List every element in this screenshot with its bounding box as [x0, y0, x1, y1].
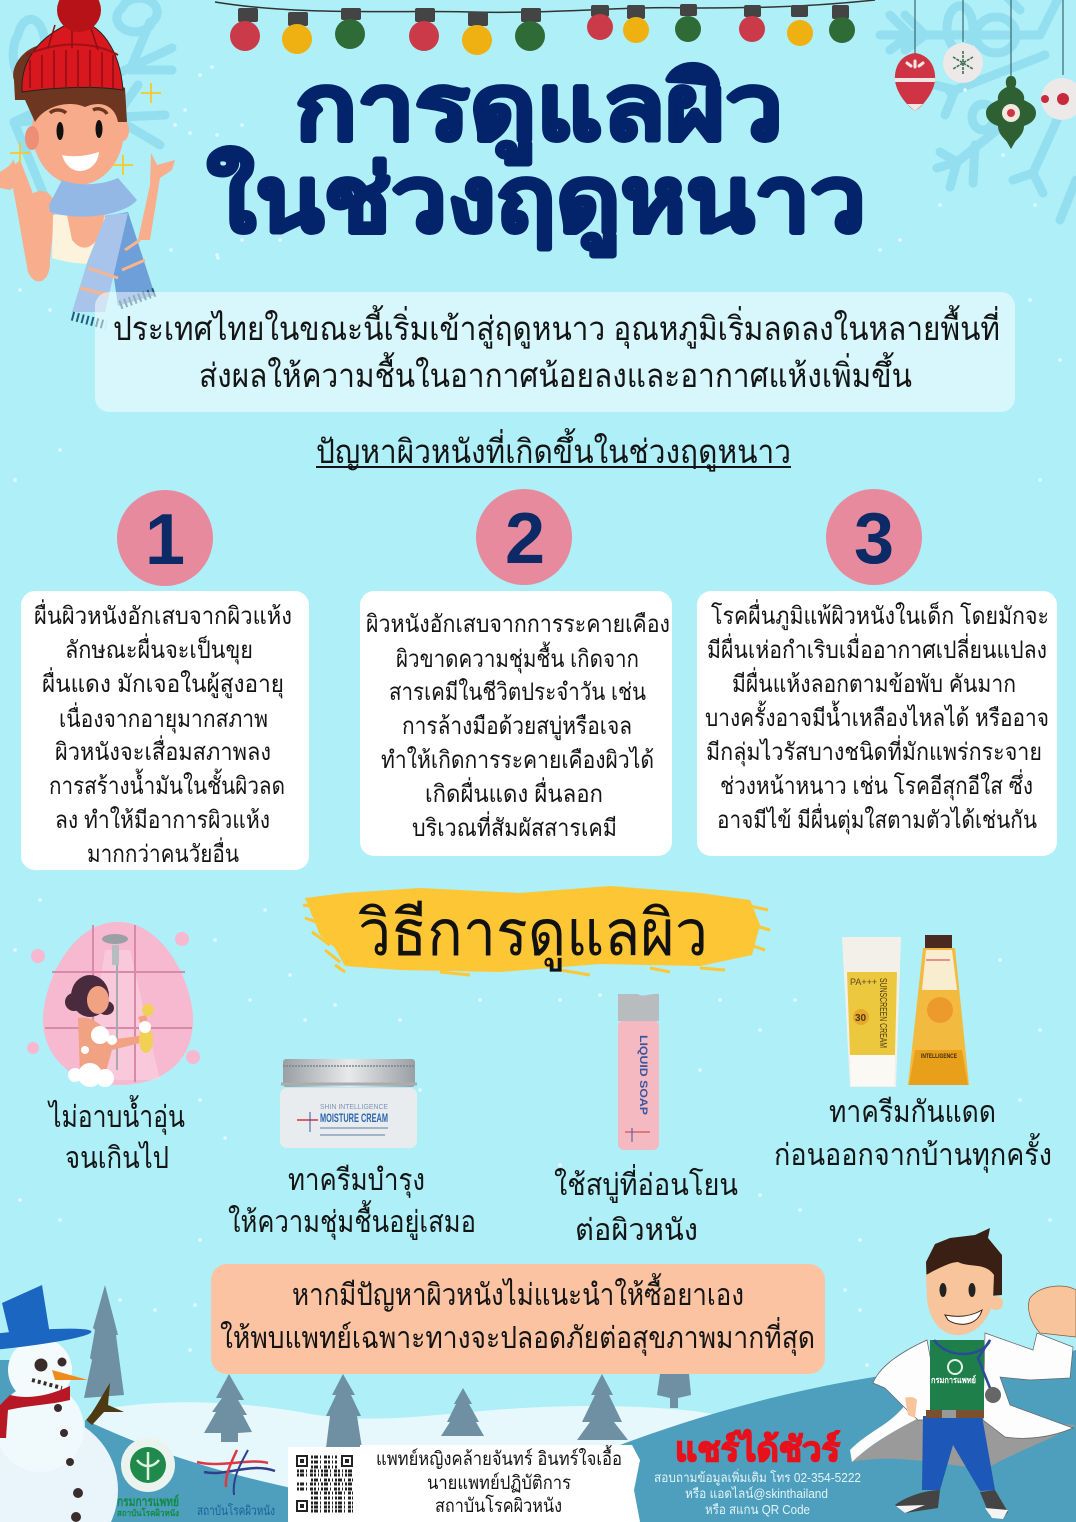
illustration: woman showering — [27, 922, 200, 1087]
number badge 3 — [826, 489, 922, 585]
caption: no hot shower: ไม่อาบน้ำอุ่น — [47, 1095, 185, 1136]
callout: see a specialist: หากมีปัญหาผิวหนังไม่แนะนำให้ซื้อยาเอง — [292, 1273, 744, 1312]
product: sunscreen tubes: INTELLIGENCE — [921, 1054, 957, 1060]
product: sunscreen tubes: SUNSCREEN CREAM — [877, 978, 888, 1048]
caption: no hot shower — [47, 1095, 185, 1175]
logo: institute of dermatology: สถาบันโรคผิวหนัง — [197, 1503, 275, 1518]
panel: problem 1: ผื่นแดง มักเจอในผู้สูงอายุ — [42, 667, 284, 699]
panel: problem 2: ผิวขาดความชุ่มชื้น เกิดจาก — [396, 641, 639, 674]
QR code — [288, 1447, 360, 1522]
left blue slope behind snowman — [0, 1360, 30, 1522]
logo: department of medical services: กรมการแพทย์ — [117, 1494, 179, 1509]
panel: intro: ประเทศไทยในขณะนี้เริ่มเข้าสู่ฤดูหนาว อุณหภูมิเริ่มลดลงในหลายพื้นที่ — [113, 305, 1000, 349]
logo: institute of dermatology — [197, 1450, 275, 1518]
share slogan and contact: หรือ แอดไลน์@skinthailand — [685, 1486, 828, 1501]
caption: sunscreen: ทาครีมกันแดด — [829, 1096, 996, 1129]
hanging ornaments — [895, 0, 1076, 149]
panel: authors: สถาบันโรคผิวหนัง — [435, 1494, 562, 1517]
panel: problem 2: ทำให้เกิดการระคายเคืองผิวได้ — [381, 746, 654, 774]
caption: no hot shower: จนเกินไป — [65, 1140, 169, 1175]
panel: problem 3 — [697, 591, 1057, 856]
number badge 3: 3 — [854, 499, 894, 579]
panel: problem 3: ช่วงหน้าหนาว เช่น โรคอีสุกอีใส ซึ่ง — [720, 769, 1033, 801]
product: sunscreen tubes: 30 — [855, 1013, 867, 1024]
panel: problem 2: บริเวณที่สัมผัสสารเคมี — [412, 811, 617, 842]
product: sunscreen tubes: PA+++ — [850, 977, 877, 987]
panel: problem 1 — [21, 591, 309, 870]
caption: sunscreen: ก่อนออกจากบ้านทุกครั้ง — [774, 1133, 1052, 1174]
heading: skin problems: ปัญหาผิวหนังที่เกิดขึ้นในช่วงฤดูหนาว — [316, 428, 791, 472]
panel: authors: นายแพทย์ปฏิบัติการ — [427, 1472, 571, 1494]
share slogan and contact — [654, 1429, 861, 1517]
number badge 1 — [117, 490, 213, 586]
panel: intro: ส่งผลให้ความชื้นในอากาศน้อยลงและอากาศแห้งเพิ่มขึ้น — [199, 352, 912, 394]
panel: problem 1: เนื่องจากอายุมากสภาพ — [59, 702, 268, 734]
share slogan and contact: แชร์ได้ชัวร์ — [675, 1429, 841, 1469]
sparkles — [10, 83, 161, 175]
panel: problem 1: ผิวหนังจะเสื่อมสภาพลง — [55, 735, 271, 766]
panel: authors — [360, 1445, 640, 1522]
panel: problem 2: เกิดผื่นแดง ผื่นลอก — [425, 777, 603, 808]
share slogan and contact: หรือ สแกน QR Code — [705, 1502, 810, 1517]
title: ในช่วงฤดูหนาว — [207, 147, 866, 257]
character: snowman — [0, 1285, 124, 1522]
caption: sunscreen — [774, 1096, 1052, 1174]
callout: see a specialist: ให้พบแพทย์เฉพาะทางจะปลอดภัยต่อสุขภาพมากที่สุด — [220, 1317, 815, 1357]
caption: moisturizer: ทาครีมบำรุง — [288, 1164, 425, 1199]
product: moisture cream jar: MOISTURE CREAM — [320, 1111, 388, 1125]
panel: authors: แพทย์หญิงคล้ายจันทร์ อินทร์ใจเอื้อ — [376, 1445, 622, 1470]
caption: gentle soap — [554, 1164, 738, 1247]
heading: how to care for skin: วิธีการดูแลผิว — [358, 897, 708, 972]
panel: problem 2: สารเคมีในชีวิตประจำวัน เช่น — [389, 678, 646, 706]
panel: problem 1: การสร้างน้ำมันในชั้นผิวลด — [49, 768, 285, 800]
product: sunscreen tubes — [842, 935, 969, 1087]
caption: gentle soap: ต่อผิวหนัง — [575, 1214, 698, 1247]
panel: problem 2: การล้างมือด้วยสบู่หรือเจล — [402, 713, 632, 741]
panel: problem 3: มีผื่นแห้งลอกตามข้อพับ คันมาก — [732, 667, 1016, 698]
character: doctor: กรมการแพทย์ — [931, 1374, 976, 1385]
pine trees — [84, 1285, 691, 1448]
number badge 2 — [476, 489, 572, 585]
blue hill left — [85, 1420, 360, 1522]
panel: problem 1: ลักษณะผื่นจะเป็นขุย — [65, 633, 253, 665]
panel: problem 2: ผิวหนังอักเสบจากการระคายเคือง — [366, 611, 670, 638]
background snowflakes — [13, 0, 1076, 220]
panel: problem 1: ลง ทำให้มีอาการผิวแห้ง — [55, 806, 270, 834]
snow hill — [90, 1402, 730, 1522]
panel: problem 1: ผื่นผิวหนังอักเสบจากผิวแห้ง — [34, 599, 292, 630]
product: moisture cream jar — [280, 1059, 417, 1148]
product: liquid soap bottle: LIQUID SOAP — [637, 1035, 649, 1115]
title: การดูแลผิว — [295, 57, 783, 165]
logo: department of medical services: สถาบันโรคผิวหนัง — [117, 1507, 179, 1518]
caption: moisturizer — [228, 1164, 476, 1241]
panel: intro — [95, 292, 1015, 412]
product: moisture cream jar: SHIN INTELLIGENCE — [320, 1104, 388, 1111]
panel: problem 2 — [360, 591, 672, 856]
panel: problem 1: มากกว่าคนวัยอื่น — [87, 837, 239, 868]
callout: see a specialist — [211, 1264, 825, 1374]
product: liquid soap bottle — [618, 994, 659, 1150]
string lights — [215, 0, 875, 55]
caption: gentle soap: ใช้สบู่ที่อ่อนโยน — [554, 1164, 738, 1203]
number badge 2: 2 — [505, 499, 545, 579]
logo: department of medical services — [117, 1438, 179, 1518]
title — [207, 57, 866, 257]
character: boy with red hat and scarf — [0, 0, 175, 325]
caption: moisturizer: ให้ความชุ่มชื้นอยู่เสมอ — [228, 1200, 476, 1241]
panel: problem 3: มีกลุ่มไวรัสบางชนิดที่มักแพร่กระจาย — [706, 735, 1042, 767]
heading: how to care for skin — [303, 886, 770, 975]
share slogan and contact: สอบถามข้อมูลเพิ่มเติม โทร 02-354-5222 — [654, 1469, 861, 1486]
blue hill right — [560, 1350, 1076, 1522]
character: doctor — [850, 1228, 1076, 1519]
number badge 1: 1 — [145, 500, 185, 580]
